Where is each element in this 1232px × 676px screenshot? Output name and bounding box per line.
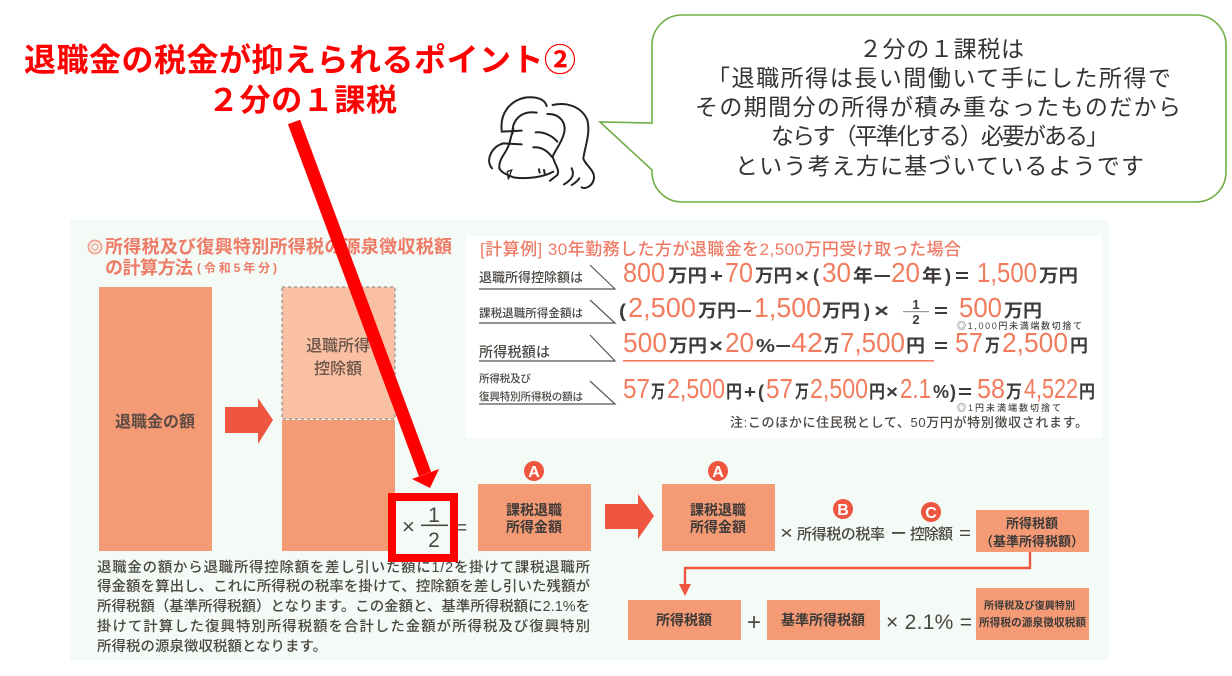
row 4: × — [886, 382, 898, 402]
box: taxable retirement income second: 課税退職 — [690, 502, 746, 518]
row 1: 万円 — [755, 266, 792, 286]
bubble text: その期間分の所得が積み重なったものだから — [695, 94, 1181, 120]
row 4: 万 — [795, 382, 809, 402]
row 4: 万 — [651, 382, 665, 402]
row 1: 70 — [725, 257, 753, 288]
box: base income tax: 基準所得税額 — [781, 612, 865, 628]
box: taxable retirement income — [478, 484, 591, 551]
row 1: 800 — [623, 257, 665, 288]
row 3: 42 — [791, 327, 823, 358]
bubble text: という考え方に基づいているようです — [735, 153, 1144, 179]
bubble text: ２分の１課税は — [859, 36, 1024, 62]
chart heading: の計算方法 — [105, 257, 193, 278]
box: total withholding tax: 所得税の源泉徴収税額 — [979, 616, 1086, 629]
row 3: 7,500 — [840, 327, 905, 358]
row 1: 30 — [822, 257, 851, 288]
formula: tax rate minus deduction: 控除額 — [910, 526, 953, 543]
explanation text: 所得税の源泉徴収税額となります。 — [97, 638, 327, 655]
row 2: 課税退職所得金額は — [479, 306, 583, 320]
panel: tax calculation chart — [70, 220, 1109, 660]
explanation text: 退職金の額から退職所得控除額を差し引いた額に1/2を掛けて課税退職所 — [97, 559, 590, 576]
box: taxable retirement income second: 所得金額 — [690, 519, 746, 535]
fraction: times one half equals: 1 — [428, 504, 440, 527]
row 4: % — [933, 382, 949, 402]
bar: retirement income deduction: 控除額 — [314, 360, 362, 378]
row 4: ◎1円未満端数切捨て — [957, 402, 1061, 413]
row 4: 所得税及び — [479, 372, 532, 385]
row 4: 2.1 — [900, 373, 931, 404]
plus sign: + — [747, 609, 761, 636]
box: total withholding tax — [976, 588, 1089, 640]
chart heading: (令和5年分) — [197, 260, 277, 275]
row 1: + — [710, 266, 723, 286]
bubble text: ならす（平準化する）必要がある」 — [771, 123, 1109, 149]
badge A: A — [528, 464, 540, 481]
icon: hand drawn woman face — [489, 97, 594, 188]
row 1: × — [795, 266, 809, 286]
row 3: % — [756, 336, 775, 356]
arrow: to second formula — [605, 494, 654, 539]
explanation text: 所得税額（基準所得税額）となります。この金額と、基準所得税額に2.1%を — [97, 598, 590, 615]
box: income tax — [628, 600, 741, 640]
arrow: bar to deduction — [225, 398, 273, 444]
footnote: 注:このほかに住民税として、50万円が特別徴収されます。 — [730, 415, 1088, 430]
row 4: 万 — [1006, 382, 1022, 402]
row 4: + — [744, 382, 756, 402]
bubble text: 「退職所得は長い間働いて手にした所得で — [707, 65, 1171, 91]
fraction: times one half equals: × — [402, 514, 415, 539]
row 2: × — [874, 301, 889, 321]
formula: tax rate minus deduction — [780, 523, 971, 543]
formula: tax rate minus deduction: × — [780, 523, 793, 543]
panel: calculation example — [466, 236, 1102, 438]
explanation text — [97, 559, 591, 655]
row 2: ) — [864, 301, 870, 321]
row 4: 2,500 — [810, 373, 868, 404]
row 3: 万 — [824, 336, 839, 356]
row 3: 20 — [725, 327, 754, 358]
badge A — [524, 461, 544, 481]
bubble text — [695, 36, 1181, 179]
box: income tax: 所得税額 — [656, 612, 712, 628]
row 1: ( — [813, 266, 819, 286]
chart heading: 所得税及び復興特別所得税の源泉徴収税額 — [105, 237, 452, 257]
title — [24, 42, 576, 118]
red highlight box — [392, 497, 454, 558]
row 2: − — [736, 301, 752, 321]
row 2: ◎1,000円未満端数切捨て — [957, 320, 1082, 331]
row 2: 1,500 — [754, 292, 821, 323]
formula: tax rate minus deduction: = — [959, 523, 971, 543]
box: total withholding tax: 所得税及び復興特別 — [984, 599, 1075, 612]
row 3: 円 — [1070, 336, 1088, 356]
row 4: ) — [950, 382, 956, 402]
row 4: 円 — [1079, 382, 1095, 402]
row 1: 年 — [853, 265, 873, 286]
row 4: 円 — [869, 382, 885, 402]
row 4: = — [958, 382, 972, 402]
row 1: 20 — [891, 257, 920, 288]
row 2: 万円 — [822, 301, 860, 321]
row 1: 1,500 — [977, 257, 1037, 288]
row 3: 円 — [906, 336, 925, 356]
box: income tax amount — [976, 510, 1089, 552]
title: ２分の１課税 — [208, 83, 397, 118]
row 4: 復興特別所得税の額は — [479, 390, 584, 403]
box: taxable retirement income second — [662, 484, 775, 551]
connector arrow — [679, 552, 1030, 596]
fraction: times one half equals — [402, 504, 467, 552]
explanation text: 掛けて計算した復興特別所得税額を合計した金額が所得税及び復興特別 — [97, 617, 590, 635]
row 3: × — [709, 336, 723, 356]
fraction: times one half equals: 2 — [428, 529, 440, 552]
bar: retirement income deduction: 退職所得 — [306, 337, 370, 355]
row 4 — [479, 372, 1095, 413]
row 2: 万円 — [698, 301, 736, 321]
row 3: = — [934, 336, 948, 356]
title: 退職金の税金が抑えられるポイント② — [24, 42, 576, 78]
badge A second: A — [712, 464, 724, 481]
row 4: 円 — [726, 382, 742, 402]
row 3: 500 — [623, 327, 667, 358]
row 2: ( — [619, 301, 626, 321]
explanation text: 得金額を算出し、これに所得税の税率を掛けて、控除額を差し引いた残額が — [97, 577, 591, 595]
box: taxable retirement income: 所得金額 — [506, 519, 562, 535]
row 3: − — [775, 336, 791, 356]
row 3: 万 — [985, 336, 1000, 356]
row 4: 57 — [766, 373, 793, 404]
row 3: 57 — [955, 327, 983, 358]
bar: retirement pay amount — [99, 287, 212, 551]
row 1 — [479, 257, 1078, 289]
row 3: 所得税額は — [479, 344, 550, 360]
row 2: = — [934, 301, 948, 321]
row 1: − — [873, 266, 891, 286]
row 3 — [479, 327, 1088, 362]
row 2: 万円 — [1004, 301, 1042, 321]
row 1: 退職所得控除額は — [479, 270, 583, 285]
badge B — [833, 499, 853, 519]
row 1: 万円 — [668, 266, 707, 286]
speech bubble — [600, 15, 1226, 202]
row 4: 57 — [623, 373, 650, 404]
badge A second — [708, 461, 728, 481]
row 1: 万円 — [1039, 266, 1078, 286]
row 4: 2,500 — [667, 373, 725, 404]
row 2: 500 — [959, 292, 1002, 323]
badge B: B — [837, 502, 849, 519]
badge C: C — [925, 505, 937, 522]
row 1: = — [955, 266, 969, 286]
row 4: ( — [758, 382, 764, 402]
example heading: [計算例] 30年勤務した方が退職金を2,500万円受け取った場合 — [480, 239, 961, 259]
row 2: 1 — [912, 297, 920, 312]
row 3: 万円 — [669, 336, 707, 356]
badge C — [921, 502, 941, 522]
formula: tax rate minus deduction: 所得税の税率 — [797, 526, 885, 543]
box: income tax amount: （基準所得税額） — [980, 534, 1084, 549]
row 2 — [479, 292, 1082, 331]
row 2: 2 — [912, 312, 920, 327]
row 4: 58 — [977, 373, 1005, 404]
chart heading — [88, 237, 452, 278]
bar: retirement income deduction — [282, 287, 395, 551]
red arrow — [294, 122, 439, 488]
box: taxable retirement income: 課税退職 — [506, 502, 562, 518]
row 4: 4,522 — [1024, 373, 1078, 404]
row 1: 年 — [922, 265, 942, 286]
row 1: ) — [945, 266, 951, 286]
row 2: 2,500 — [628, 292, 696, 323]
box: base income tax — [767, 600, 880, 640]
fraction: times one half equals: = — [456, 518, 467, 539]
formula: times 2.1 percent: × 2.1% = — [886, 611, 972, 634]
row 3: 2,500 — [1002, 327, 1068, 358]
bar: retirement pay amount: 退職金の額 — [115, 412, 195, 431]
box: income tax amount: 所得税額 — [1006, 516, 1058, 531]
